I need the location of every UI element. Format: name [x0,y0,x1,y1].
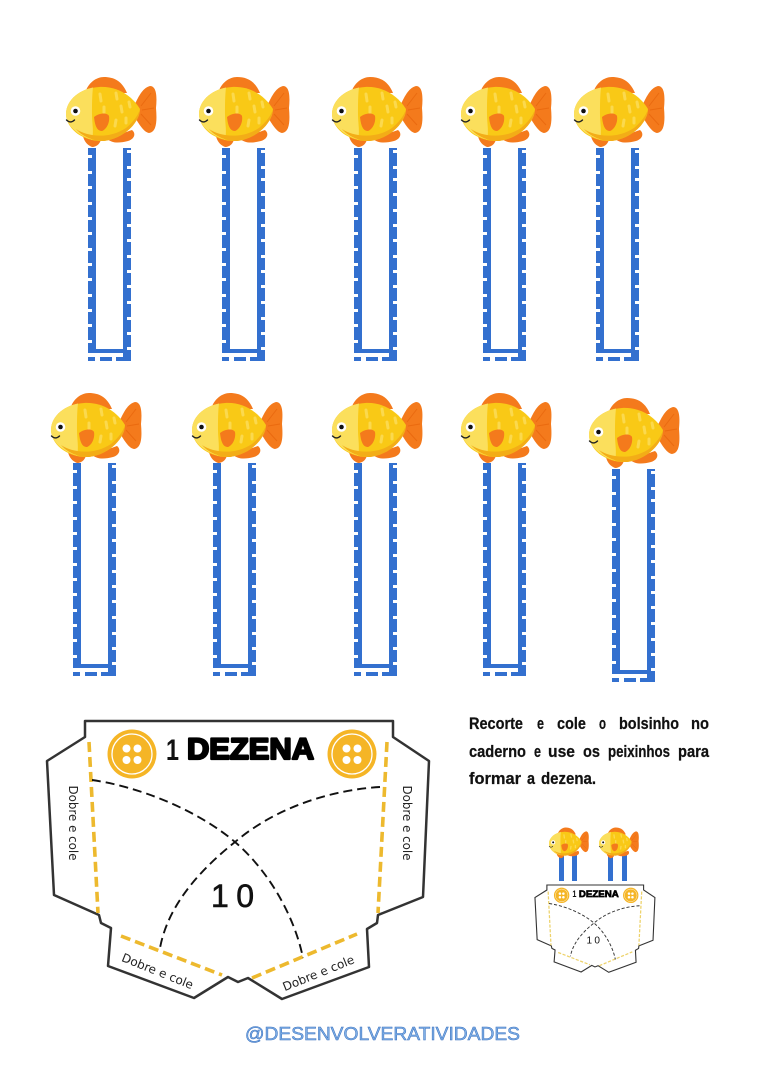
pocket title number: 1 [166,734,179,767]
strip with fish: row 2, no. 2 [192,393,282,676]
fold label bottom right: Dobre e cole [281,953,356,994]
fold label bottom left: Dobre e cole [120,951,195,992]
strip with fish: row 1, no. 3 [332,77,422,361]
strip with fish: row 1, no. 1 [66,77,156,361]
instructions text: caderno [469,742,526,761]
instructions text: cole [557,714,586,733]
footer handle: @DESENVOLVERATIVIDADES [245,1024,520,1044]
panel: pocket cut-out [47,721,429,999]
icon: left button [108,730,156,778]
example pocket: DEZENA [579,888,619,899]
example pocket: 10 [586,935,600,946]
icon: right button [328,730,376,778]
example pocket: 1 [572,888,576,899]
example fish left [549,827,589,881]
instructions text: e [537,714,544,733]
pocket outline [47,721,429,999]
black cutting arcs [92,780,380,958]
strip with fish: row 1, no. 4 [461,77,551,361]
instructions text [469,714,709,788]
strip with fish: row 1, no. 5 [574,77,664,361]
pocket title word: DEZENA [187,733,314,766]
instructions text: use [548,742,575,761]
strip with fish: row 2, no. 1 [51,393,141,676]
instructions text: no [691,714,709,733]
strip with fish: row 2, no. 4 [461,393,551,676]
instructions text: o [599,714,606,733]
instructions text: bolsinho [619,714,679,733]
strip with fish: row 2, no. 5 [589,398,679,682]
strip with fish: row 2, no. 3 [332,393,422,676]
fold label left: Dobre e cole [66,786,80,860]
instructions text: peixinhos [608,742,670,761]
instructions text: dezena. [541,769,596,788]
pocket number ten: 10 [211,878,254,914]
yellow fold lines [89,742,387,978]
instructions text: a [527,769,535,788]
instructions text: os [583,742,600,761]
instructions text: para [678,742,709,761]
instructions text: Recorte [469,714,523,733]
fold label right: Dobre e cole [400,786,414,860]
example fish right [599,827,639,881]
strip with fish: row 1, no. 2 [199,77,289,361]
instructions text: formar [469,769,521,788]
example pocket [535,885,655,972]
instructions text: e [534,742,541,761]
example illustration [535,827,655,972]
